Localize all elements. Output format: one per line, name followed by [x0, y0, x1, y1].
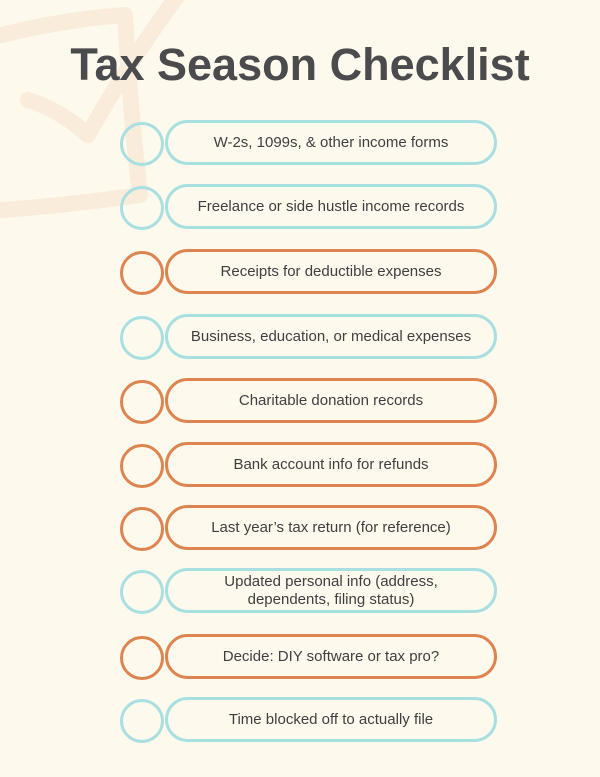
- item 1: W-2s, 1099s, & other income forms: [214, 134, 448, 150]
- item 2: [120, 184, 497, 230]
- item 2: Freelance or side hustle income records: [198, 198, 464, 214]
- item 9: Decide: DIY software or tax pro?: [223, 648, 439, 664]
- item 10: [120, 697, 497, 743]
- item 4: [120, 314, 497, 360]
- item 1: [120, 120, 497, 166]
- item 7: [120, 505, 497, 551]
- item 5: Charitable donation records: [239, 392, 423, 408]
- item 8: [120, 568, 497, 614]
- item 6: [120, 442, 497, 488]
- item 9: [120, 634, 497, 680]
- item 8: Updated personal info (address,: [224, 572, 438, 590]
- item 8: dependents, filing status): [248, 590, 414, 608]
- item 5: [120, 378, 497, 424]
- item 3: [120, 249, 497, 295]
- decorative checkbox background: [0, 0, 184, 218]
- item 10: Time blocked off to actually file: [229, 710, 433, 728]
- item 7: Last year’s tax return (for reference): [211, 518, 451, 536]
- item 3: Receipts for deductible expenses: [221, 262, 441, 280]
- item 4: Business, education, or medical expenses: [191, 328, 471, 344]
- item 6: Bank account info for refunds: [233, 456, 429, 472]
- title: Tax Season Checklist: [70, 39, 530, 90]
